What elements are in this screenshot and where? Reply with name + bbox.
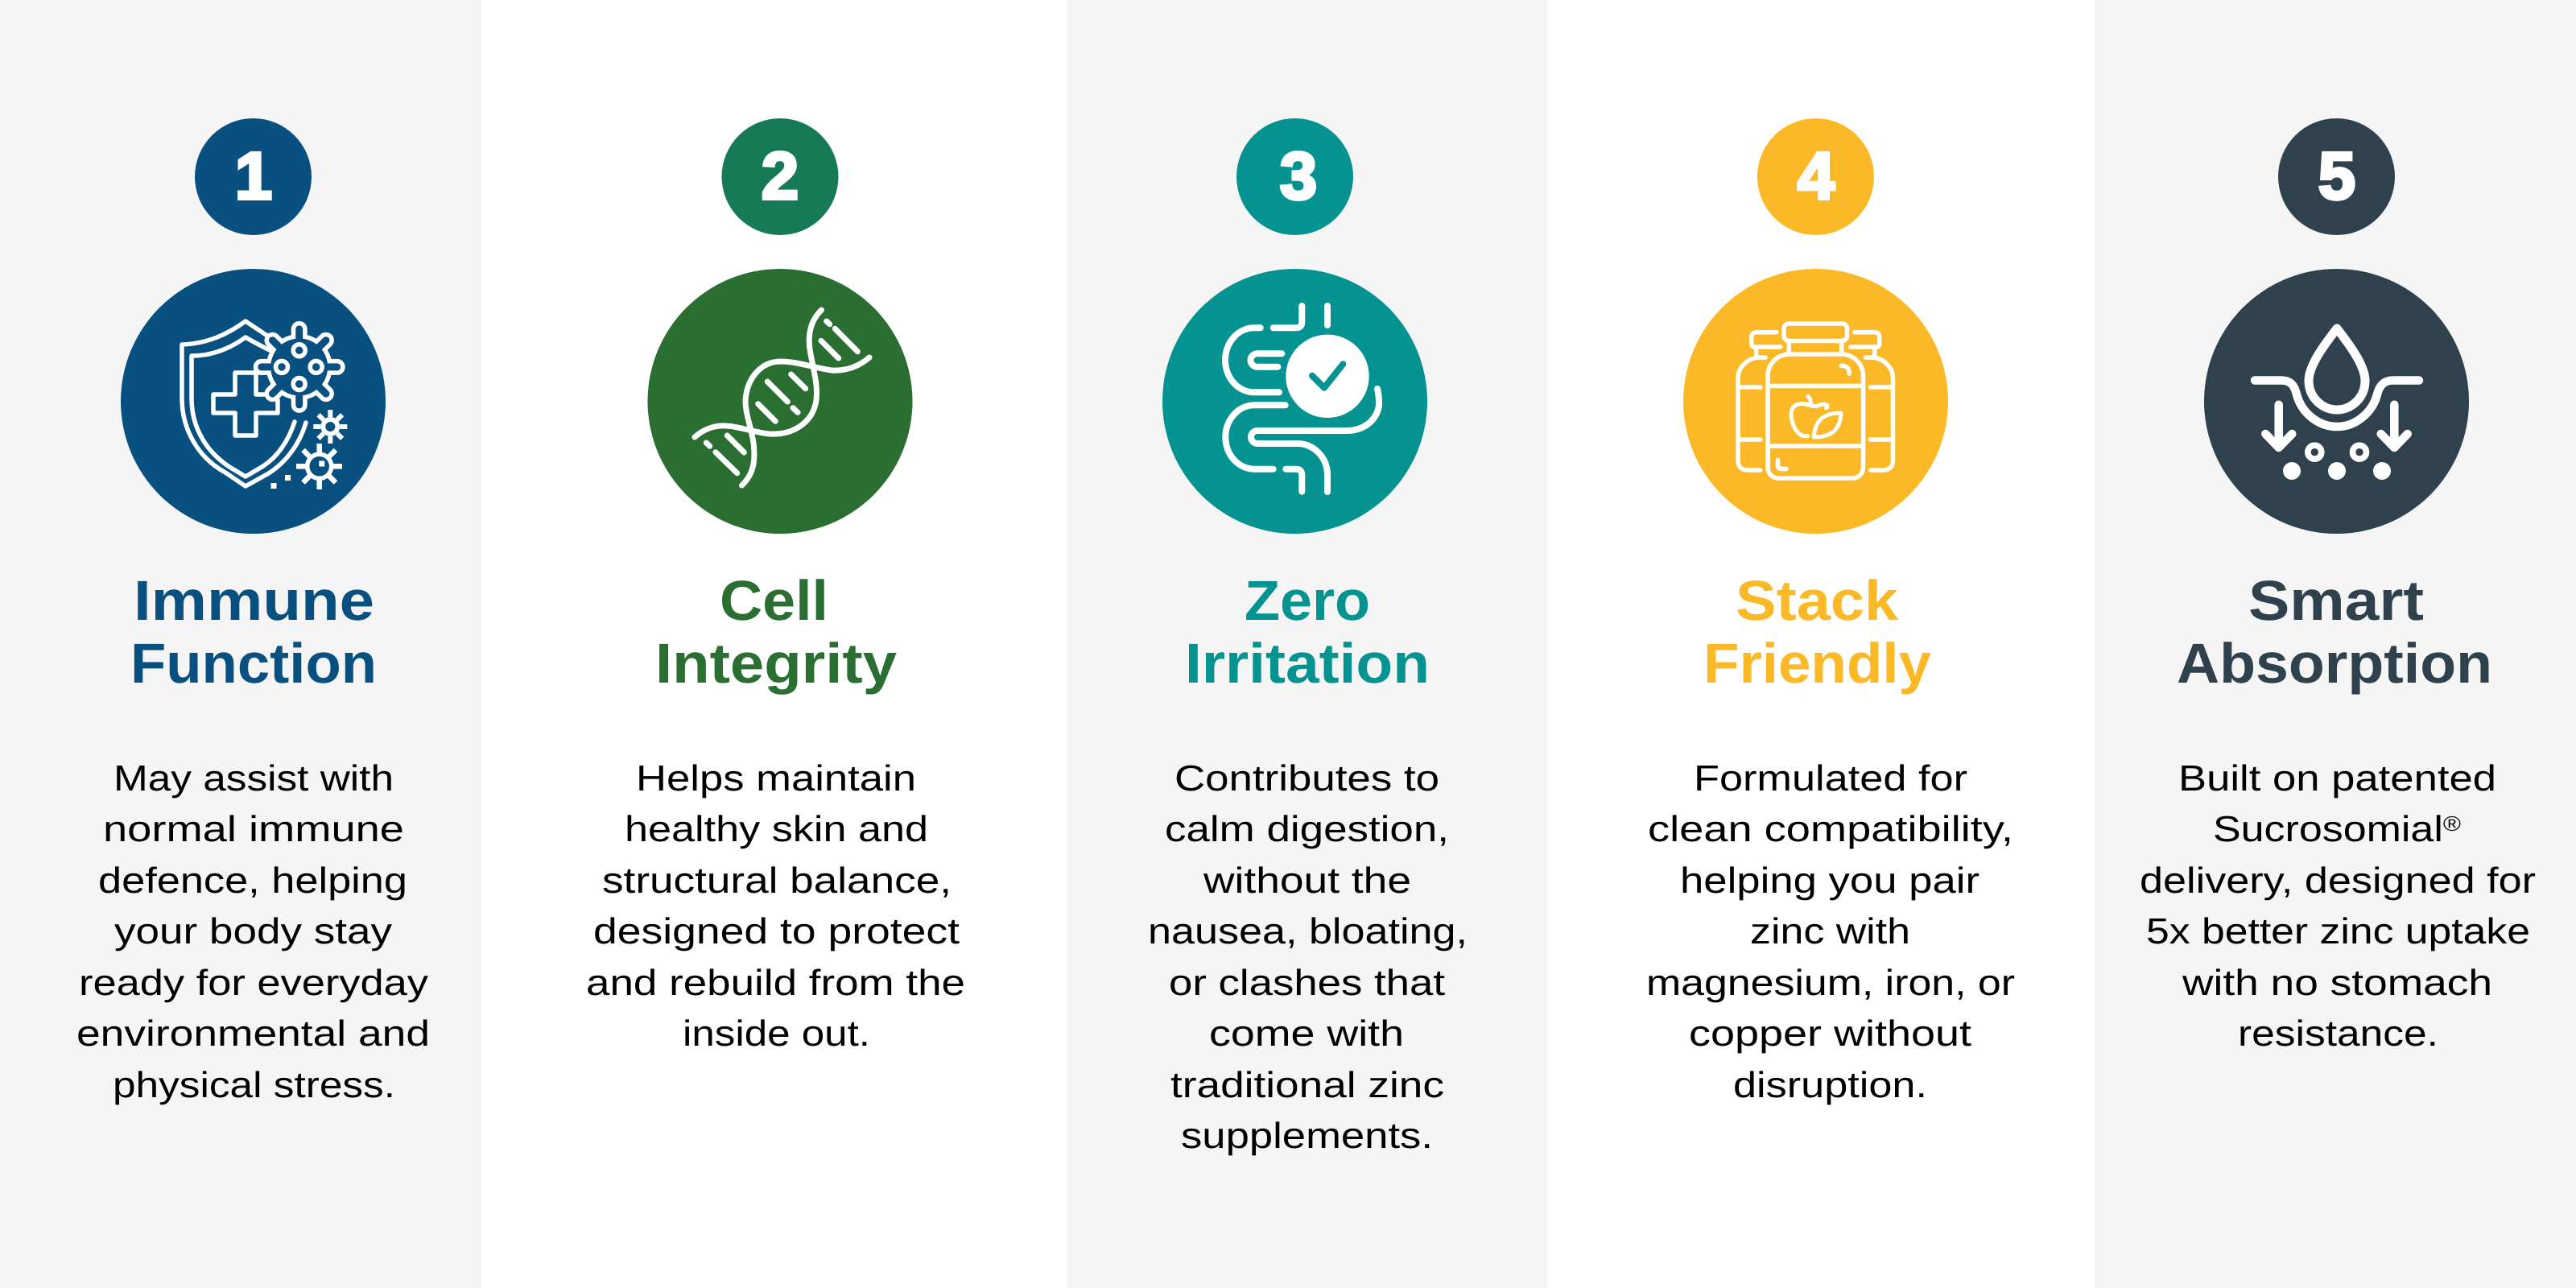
- panel: zero irritation: [1067, 0, 1547, 1288]
- text block: stack description: disruption.: [1733, 1064, 1927, 1105]
- heading: Cell Integrity: Cell: [720, 569, 828, 632]
- panel: smart absorption: [2095, 0, 2576, 1288]
- number badge 1: [195, 118, 312, 235]
- heading: Smart Absorption: Absorption: [2177, 632, 2492, 695]
- number badge 1: 1: [235, 138, 272, 213]
- icon: gut with check: [1162, 269, 1427, 534]
- heading: Immune Function: [130, 569, 377, 695]
- text block: stack description: Formulated for: [1694, 758, 1967, 799]
- number badge 5: [2278, 118, 2395, 235]
- text block: cell description: healthy skin and: [625, 808, 928, 849]
- heading: Immune Function: Immune: [134, 569, 374, 632]
- text block: immune description: normal immune: [103, 808, 404, 849]
- text block: cell description: [586, 758, 965, 1054]
- text block: irritation description: calm digestion,: [1165, 808, 1449, 849]
- heading: Stack Friendly: Stack: [1736, 569, 1898, 632]
- text block: irritation description: without the: [1203, 860, 1411, 901]
- panel: cell integrity: [481, 0, 1067, 1288]
- text block: immune description: defence, helping: [98, 860, 407, 901]
- text block: stack description: zinc with: [1750, 910, 1910, 952]
- text block: stack description: copper without: [1689, 1013, 1972, 1054]
- text block: immune description: May assist with: [114, 758, 394, 799]
- number badge 3: 3: [1280, 138, 1317, 213]
- text block: irritation description: [1148, 758, 1468, 1156]
- text block: cell description: and rebuild from the: [586, 962, 965, 1003]
- number badge 2: 2: [762, 138, 799, 213]
- text block: cell description: inside out.: [683, 1013, 870, 1054]
- text block: irritation description: or clashes that: [1169, 962, 1446, 1003]
- text block: immune description: environmental and: [76, 1013, 430, 1054]
- heading: Zero Irritation: Zero: [1245, 569, 1370, 632]
- text block: stack description: [1646, 758, 2015, 1105]
- panel: immune function: [0, 0, 481, 1288]
- heading: Cell Integrity: [655, 569, 897, 695]
- text block: absorption description: Sucrosomial: [2213, 808, 2413, 849]
- heading: Stack Friendly: Friendly: [1703, 632, 1931, 695]
- panel: stack friendly: [1547, 0, 2095, 1288]
- heading: Cell Integrity: Integrity: [655, 632, 897, 695]
- number badge 2: [721, 118, 839, 235]
- text block: irritation description: nausea, bloating,: [1148, 910, 1468, 952]
- text block: cell description: designed to protect: [593, 910, 960, 952]
- icon: DNA helix: [647, 269, 913, 534]
- text block: immune description: [76, 758, 430, 1105]
- heading: Smart Absorption: Smart: [2248, 569, 2424, 632]
- heading: Stack Friendly: [1703, 569, 1931, 695]
- text block: cell description: structural balance,: [602, 860, 952, 901]
- text block: absorption description: Built on patented: [2178, 758, 2496, 799]
- text block: absorption description: [2140, 758, 2536, 1054]
- text block: irritation description: Contributes to: [1174, 758, 1439, 799]
- heading: Smart Absorption: [2177, 569, 2492, 695]
- text block: absorption description: resistance.: [2238, 1013, 2438, 1054]
- text block: absorption description: with no stomach: [2182, 962, 2492, 1003]
- text block: irritation description: traditional zinc: [1170, 1064, 1444, 1105]
- number badge 4: [1757, 118, 1874, 235]
- text block: absorption description: 5x better zinc uptake: [2146, 910, 2530, 952]
- heading: Zero Irritation: [1185, 569, 1430, 695]
- heading: Zero Irritation: Irritation: [1185, 632, 1430, 695]
- heading: Immune Function: Function: [130, 632, 377, 695]
- text block: immune description: ready for everyday: [79, 962, 429, 1003]
- icon: supplement bottles: [1683, 269, 1948, 534]
- text block: immune description: your body stay: [114, 910, 393, 952]
- text block: immune description: physical stress.: [113, 1064, 395, 1105]
- text block: absorption description: ®: [2443, 811, 2461, 836]
- text block: irritation description: supplements.: [1181, 1115, 1433, 1156]
- text block: absorption description: delivery, designed for: [2140, 860, 2536, 901]
- text block: stack description: magnesium, iron, or: [1646, 962, 2015, 1003]
- number badge 3: [1236, 118, 1353, 235]
- text block: irritation description: come with: [1209, 1013, 1404, 1054]
- number badge 4: 4: [1798, 138, 1835, 213]
- icon: drop absorption: [2204, 269, 2469, 534]
- icon: shield and virus: [121, 269, 386, 534]
- text block: cell description: Helps maintain: [636, 758, 916, 799]
- number badge 5: 5: [2318, 138, 2355, 213]
- text block: stack description: helping you pair: [1680, 860, 1979, 901]
- text block: stack description: clean compatibility,: [1648, 808, 2013, 849]
